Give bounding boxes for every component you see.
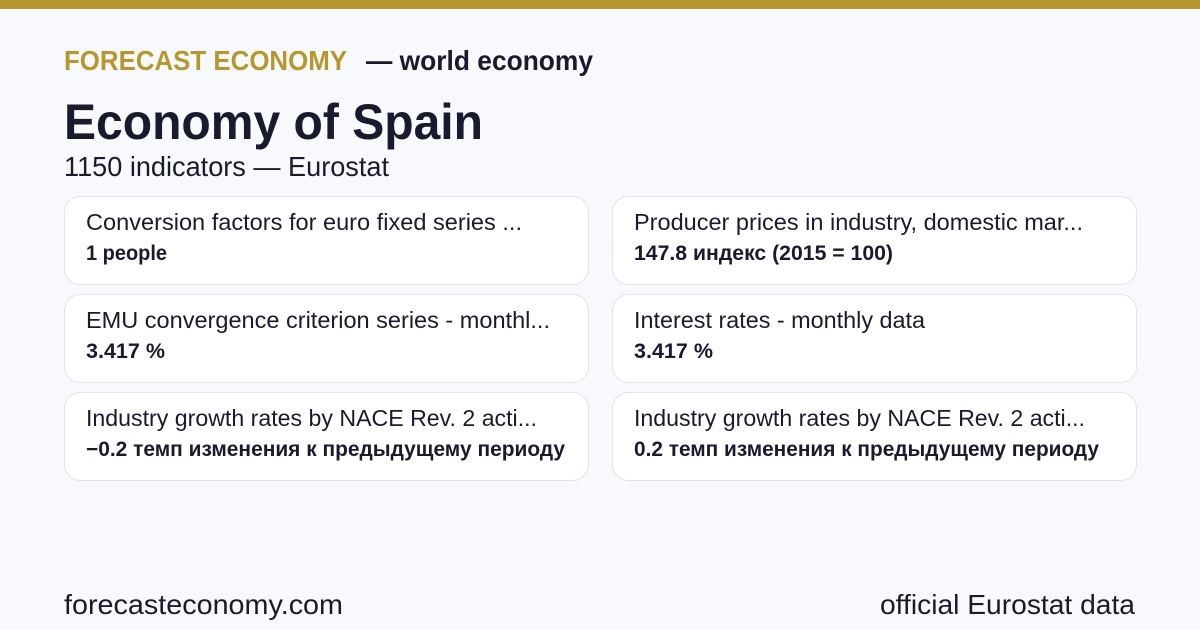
panel: industry growth card left: Industry growth rates by NACE Rev. 2 acti... — [86, 405, 537, 431]
panel: interest rates card: Interest rates - monthly data — [634, 307, 925, 333]
panel: interest rates card: 3.417 % — [634, 340, 713, 363]
panel: industry growth card right: 0.2 темп изменения к предыдущему периоду — [634, 438, 1099, 461]
panel: EMU convergence card — [64, 294, 588, 382]
footer: site name: forecasteconomy.com — [64, 589, 343, 620]
brand line: — world economy — [366, 45, 594, 76]
brand line: FORECAST ECONOMY — [64, 45, 347, 76]
subtitle: 1150 indicators — Eurostat — [64, 151, 389, 182]
panel: industry growth card left — [64, 392, 588, 480]
panel: industry growth card right: Industry growth rates by NACE Rev. 2 acti... — [634, 405, 1085, 431]
panel: EMU convergence card: 3.417 % — [86, 340, 165, 363]
brand line — [64, 45, 594, 76]
panel: producer prices card: 147.8 индекс (2015 = 100) — [634, 242, 893, 265]
panel: conversion factors card: Conversion factors for euro fixed series ... — [86, 209, 522, 235]
title: Economy of Spain — [64, 93, 483, 150]
panel: industry growth card right — [612, 392, 1136, 480]
panel: interest rates card — [612, 294, 1136, 382]
panel: conversion factors card — [64, 196, 588, 284]
footer: data source: official Eurostat data — [880, 589, 1136, 620]
panel: producer prices card: Producer prices in industry, domestic mar... — [634, 209, 1083, 235]
top accent bar — [0, 0, 1200, 9]
panel: EMU convergence card: EMU convergence criterion series - monthl... — [86, 307, 550, 333]
panel: conversion factors card: 1 people — [86, 242, 167, 265]
panel: industry growth card left: −0.2 темп изменения к предыдущему периоду — [86, 438, 565, 461]
panel: producer prices card — [612, 196, 1136, 284]
